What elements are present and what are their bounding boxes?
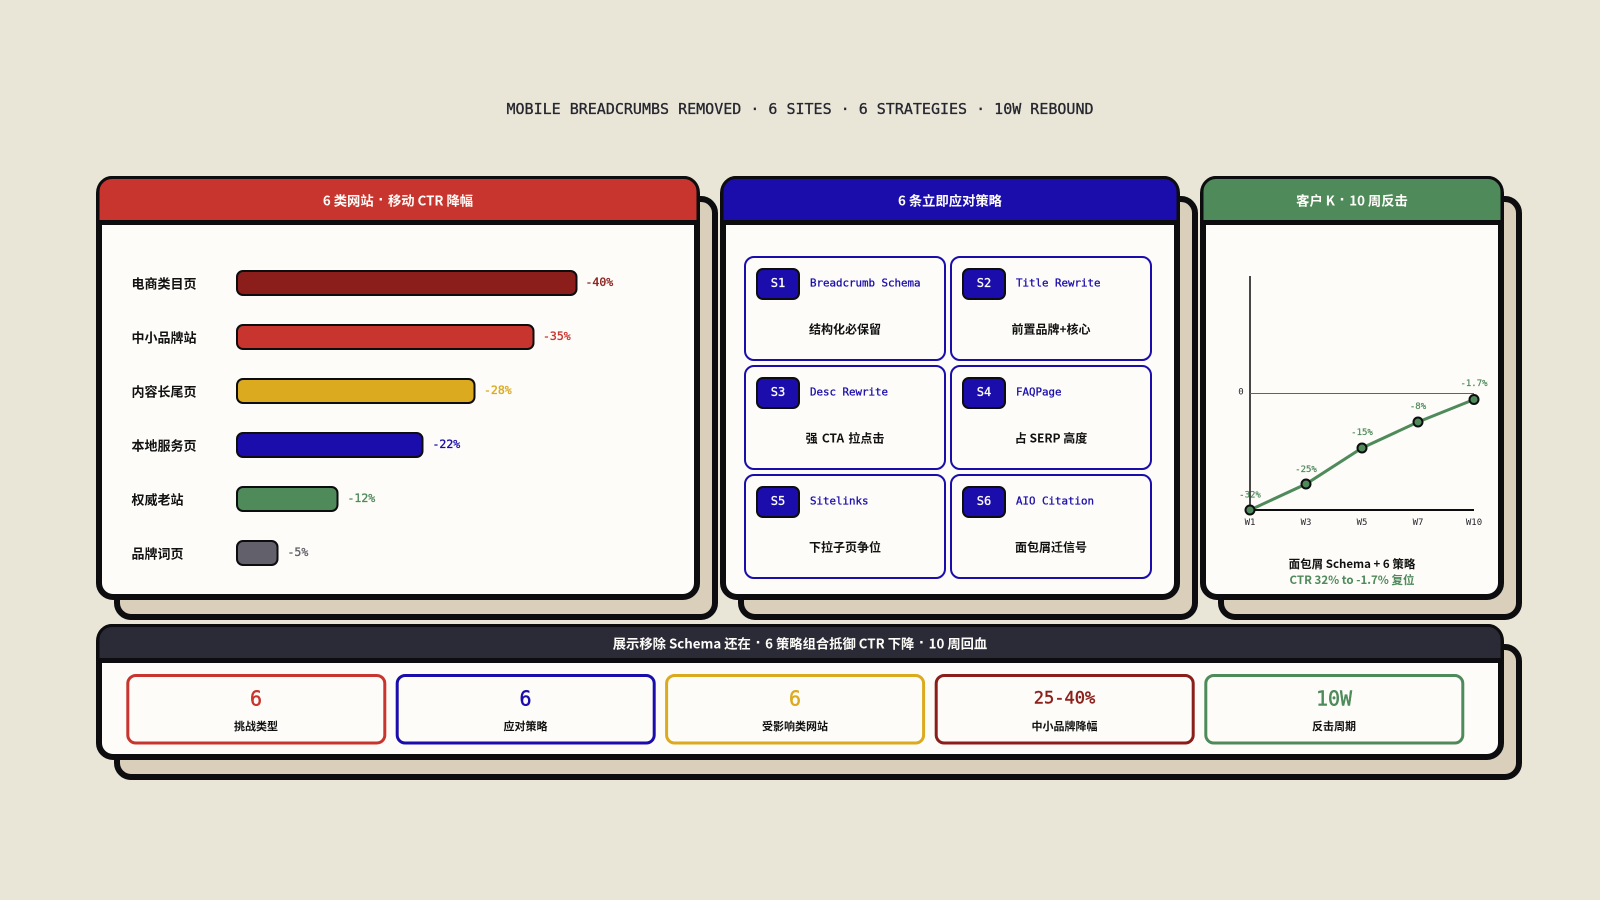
strategy card S5 — [745, 475, 945, 578]
strategy card S1: 结构化必保留 — [809, 320, 881, 338]
strategy card S3 — [745, 366, 945, 469]
stat card: challenge types — [128, 676, 385, 743]
line chart: CTR recovery — [1238, 276, 1488, 528]
stat card: affected site types: 6 — [789, 686, 801, 710]
stat card: strategies — [397, 676, 654, 743]
stat card: challenge types: 挑战类型 — [234, 718, 278, 734]
stat card: strategies: 6 — [519, 686, 532, 710]
stat card: affected site types: 受影响类网站 — [762, 718, 828, 734]
line chart: CTR recovery: W10 — [1466, 518, 1482, 528]
line chart: CTR recovery: -8% — [1410, 402, 1427, 412]
bar chart: CTR drop: -22% — [432, 437, 460, 451]
strategy card S6: S6 — [977, 494, 991, 508]
bar chart: CTR drop: 本地服务页 — [132, 436, 197, 454]
bar chart: CTR drop: 内容长尾页 — [132, 382, 197, 400]
panel header: CTR drop — [96, 178, 700, 225]
bar chart: CTR drop: 品牌词页 — [132, 544, 184, 562]
bar chart: CTR drop: -35% — [543, 329, 571, 343]
line chart: CTR recovery: W7 — [1413, 518, 1423, 528]
panel: client K rebound — [1200, 178, 1519, 617]
line chart: CTR recovery: W5 — [1357, 518, 1367, 528]
bar chart: CTR drop — [132, 271, 613, 565]
strategy card S4: S4 — [977, 385, 991, 399]
stat card: rebound period — [1206, 676, 1463, 743]
stat card: rebound period: 10W — [1316, 686, 1353, 710]
chart caption — [1289, 556, 1416, 588]
strategy card S2 — [951, 257, 1151, 360]
strategy card S1: S1 — [771, 276, 785, 290]
strategy card S6: 面包屑迁信号 — [1015, 538, 1087, 556]
strategy card S6: AIO Citation — [1016, 494, 1094, 508]
line chart: CTR recovery: -15% — [1351, 428, 1373, 438]
line chart: CTR recovery: -25% — [1295, 465, 1317, 475]
panel header: CTR drop: 6 类网站 · 移动 CTR 降幅 — [323, 190, 473, 210]
panel header: strategies — [720, 177, 1180, 225]
strategy card S3: 强 CTA 拉点击 — [806, 430, 884, 446]
strategy card S2: S2 — [977, 276, 991, 290]
strategy card S6 — [951, 475, 1151, 578]
chart caption: CTR 32% to -1.7% 复位 — [1290, 572, 1414, 588]
stat card: rebound period: 反击周期 — [1312, 718, 1356, 734]
panel header: client K: 客户 K · 10 周反击 — [1296, 190, 1408, 210]
strategy card S3: Desc Rewrite — [810, 386, 888, 398]
strategy card S2: Title Rewrite — [1016, 276, 1101, 290]
subtitle: MOBILE BREADCRUMBS REMOVED · 6 SITES · 6 STRATEGIES · 10W REBOUND — [506, 100, 1094, 118]
panel header: strategies: 6 条立即应对策略 — [898, 190, 1003, 210]
panel: CTR drop by site type — [96, 178, 715, 617]
strategy card S3: S3 — [771, 385, 785, 399]
strategy card S1 — [745, 257, 945, 360]
stat card: SMB brand drop: 中小品牌降幅 — [1032, 718, 1098, 734]
strategy card S4: FAQPage — [1016, 386, 1062, 398]
strategy card S5: 下拉子页争位 — [809, 538, 881, 556]
bar chart: CTR drop: -12% — [348, 491, 375, 505]
strategy card S4: 占 SERP 高度 — [1015, 430, 1087, 446]
stat card: challenge types: 6 — [250, 686, 262, 710]
chart caption: 面包屑 Schema + 6 策略 — [1289, 556, 1416, 572]
line chart: CTR recovery: W3 — [1301, 518, 1311, 528]
line chart: CTR recovery: -1.7% — [1460, 379, 1488, 389]
stat card: strategies: 应对策略 — [504, 718, 548, 734]
strategy card S5: S5 — [771, 494, 785, 508]
bar chart: CTR drop: -28% — [484, 383, 512, 397]
line chart: CTR recovery: 0 — [1238, 388, 1244, 398]
bar chart: CTR drop: 权威老站 — [132, 490, 184, 508]
strategy card S1: Breadcrumb Schema — [810, 276, 921, 290]
strategy card S5: Sitelinks — [810, 494, 869, 508]
stat card: SMB brand drop: 25-40% — [1034, 688, 1095, 708]
strategy card S2: 前置品牌+核心 — [1011, 320, 1091, 338]
bar chart: CTR drop: -5% — [288, 545, 308, 559]
line chart: CTR recovery: W1 — [1245, 518, 1255, 528]
panel header: client K — [1200, 178, 1504, 225]
line chart: CTR recovery: -32% — [1239, 490, 1261, 500]
stat card: affected site types — [667, 676, 924, 743]
bar chart: CTR drop: 电商类目页 — [132, 274, 197, 292]
stat card: SMB brand drop — [936, 676, 1193, 743]
bar chart: CTR drop: -40% — [586, 275, 613, 289]
panel header: summary: 展示移除 Schema 还在 · 6 策略组合抵御 CTR 下降 · 10 周回血 — [613, 634, 987, 652]
bar chart: CTR drop: 中小品牌站 — [132, 328, 197, 346]
panel header: summary — [96, 626, 1504, 663]
panel: summary stats — [96, 626, 1519, 777]
panel: six strategies — [720, 177, 1195, 617]
strategy card S4 — [951, 366, 1151, 469]
